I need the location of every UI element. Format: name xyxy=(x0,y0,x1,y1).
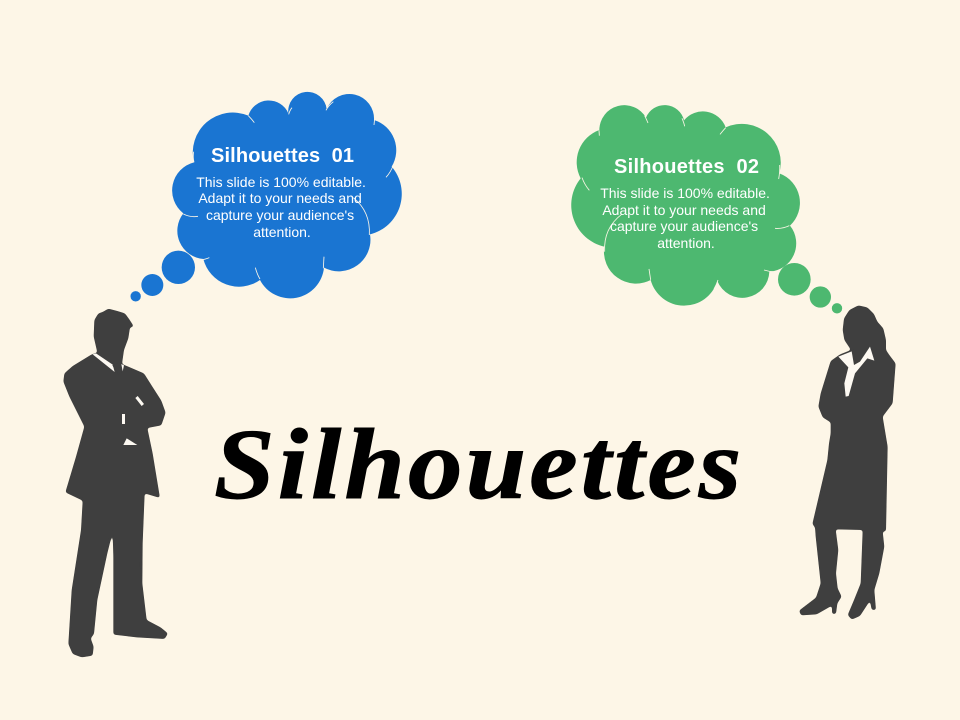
body text: Silhouettes 02: This slide is 100% editable. xyxy=(600,185,770,201)
woman body xyxy=(799,305,896,620)
man shirt highlights xyxy=(122,396,144,445)
woman blouse collar xyxy=(838,347,874,397)
body text: Silhouettes 02: attention. xyxy=(657,235,715,251)
body text: Silhouettes 01: attention. xyxy=(253,224,311,240)
thought cloud: Silhouettes 02 xyxy=(571,105,842,313)
thought bubbles xyxy=(130,251,195,301)
body text: Silhouettes 02: Adapt it to your needs and xyxy=(602,202,766,218)
thought cloud: Silhouettes 01 xyxy=(130,92,402,301)
silhouette: man xyxy=(63,309,168,657)
silhouette: woman xyxy=(799,305,896,620)
cloud shape: green xyxy=(571,105,842,313)
title: Silhouettes xyxy=(214,408,744,520)
heading: Silhouettes 01: Silhouettes 01 xyxy=(211,145,354,167)
body text: Silhouettes 01: capture your audience's xyxy=(206,207,354,223)
body text: Silhouettes 02: capture your audience's xyxy=(610,218,758,234)
body text: Silhouettes 01: This slide is 100% editable. xyxy=(196,174,366,190)
body text: Silhouettes 01: Adapt it to your needs and xyxy=(198,190,362,206)
thought bubbles xyxy=(778,263,842,313)
man tie xyxy=(112,363,122,375)
cloud shape: blue xyxy=(130,92,402,301)
man shirt collar xyxy=(93,353,124,372)
heading: Silhouettes 02: Silhouettes 02 xyxy=(614,156,759,178)
man body xyxy=(63,309,168,657)
